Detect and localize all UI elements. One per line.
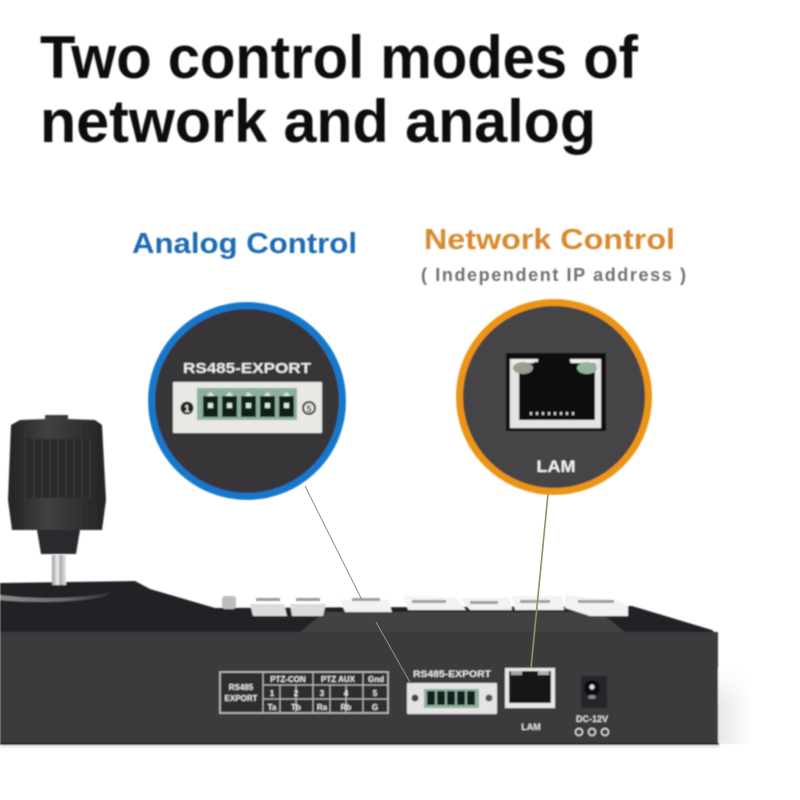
power jack — [576, 676, 608, 736]
floor shadow — [718, 670, 754, 744]
port legend table: PTZ AUX — [321, 675, 356, 684]
title — [40, 24, 639, 155]
keyboard controller — [0, 415, 756, 748]
port legend table: Tb — [291, 703, 301, 712]
joystick — [8, 415, 106, 585]
label: DC-12V: DC-12V — [576, 714, 608, 724]
keys — [222, 595, 628, 616]
callout: LAN port — [460, 302, 648, 492]
port legend table: 3 — [320, 689, 325, 698]
heading: network control — [421, 224, 686, 285]
RJ45 socket — [506, 353, 606, 431]
subheading: independent IP address: ( Independent IP address ) — [421, 265, 686, 285]
heading: network control: Network Control — [424, 224, 675, 256]
label: RS485-EXPORT: RS485-EXPORT — [183, 360, 311, 377]
port legend table: Gnd — [368, 675, 384, 684]
port legend table — [220, 672, 388, 713]
small LAN port — [505, 668, 555, 732]
top surface — [0, 581, 718, 650]
port legend table: Ra — [317, 703, 328, 712]
small RS485 connector — [407, 669, 497, 714]
port legend table: 2 — [294, 689, 299, 698]
title: Two control modes of — [40, 24, 639, 91]
port legend table: Ta — [268, 703, 277, 712]
connector plate — [173, 382, 322, 433]
port legend table: RS485 — [229, 683, 254, 692]
small RS485 connector: RS485-EXPORT — [413, 669, 491, 680]
port legend table: PTZ-CON — [270, 675, 306, 684]
port legend table: 4 — [344, 689, 349, 698]
label: LAM: LAM — [536, 457, 576, 476]
heading: analog control: Analog Control — [132, 228, 357, 260]
title: network and analog — [40, 88, 596, 155]
port legend table: EXPORT — [225, 694, 258, 703]
connector plate: 5 — [306, 404, 312, 414]
port legend table: 5 — [373, 689, 378, 698]
callout: RS485 export — [152, 306, 342, 496]
front panel — [0, 632, 718, 743]
leader line: analog — [305, 486, 411, 684]
leader line: network — [531, 494, 548, 668]
port legend table: G — [372, 703, 378, 712]
label: LAN: LAM — [521, 722, 541, 732]
port legend table: Rb — [341, 703, 351, 712]
connector plate: 1 — [184, 404, 190, 415]
port legend table: 1 — [270, 689, 275, 698]
